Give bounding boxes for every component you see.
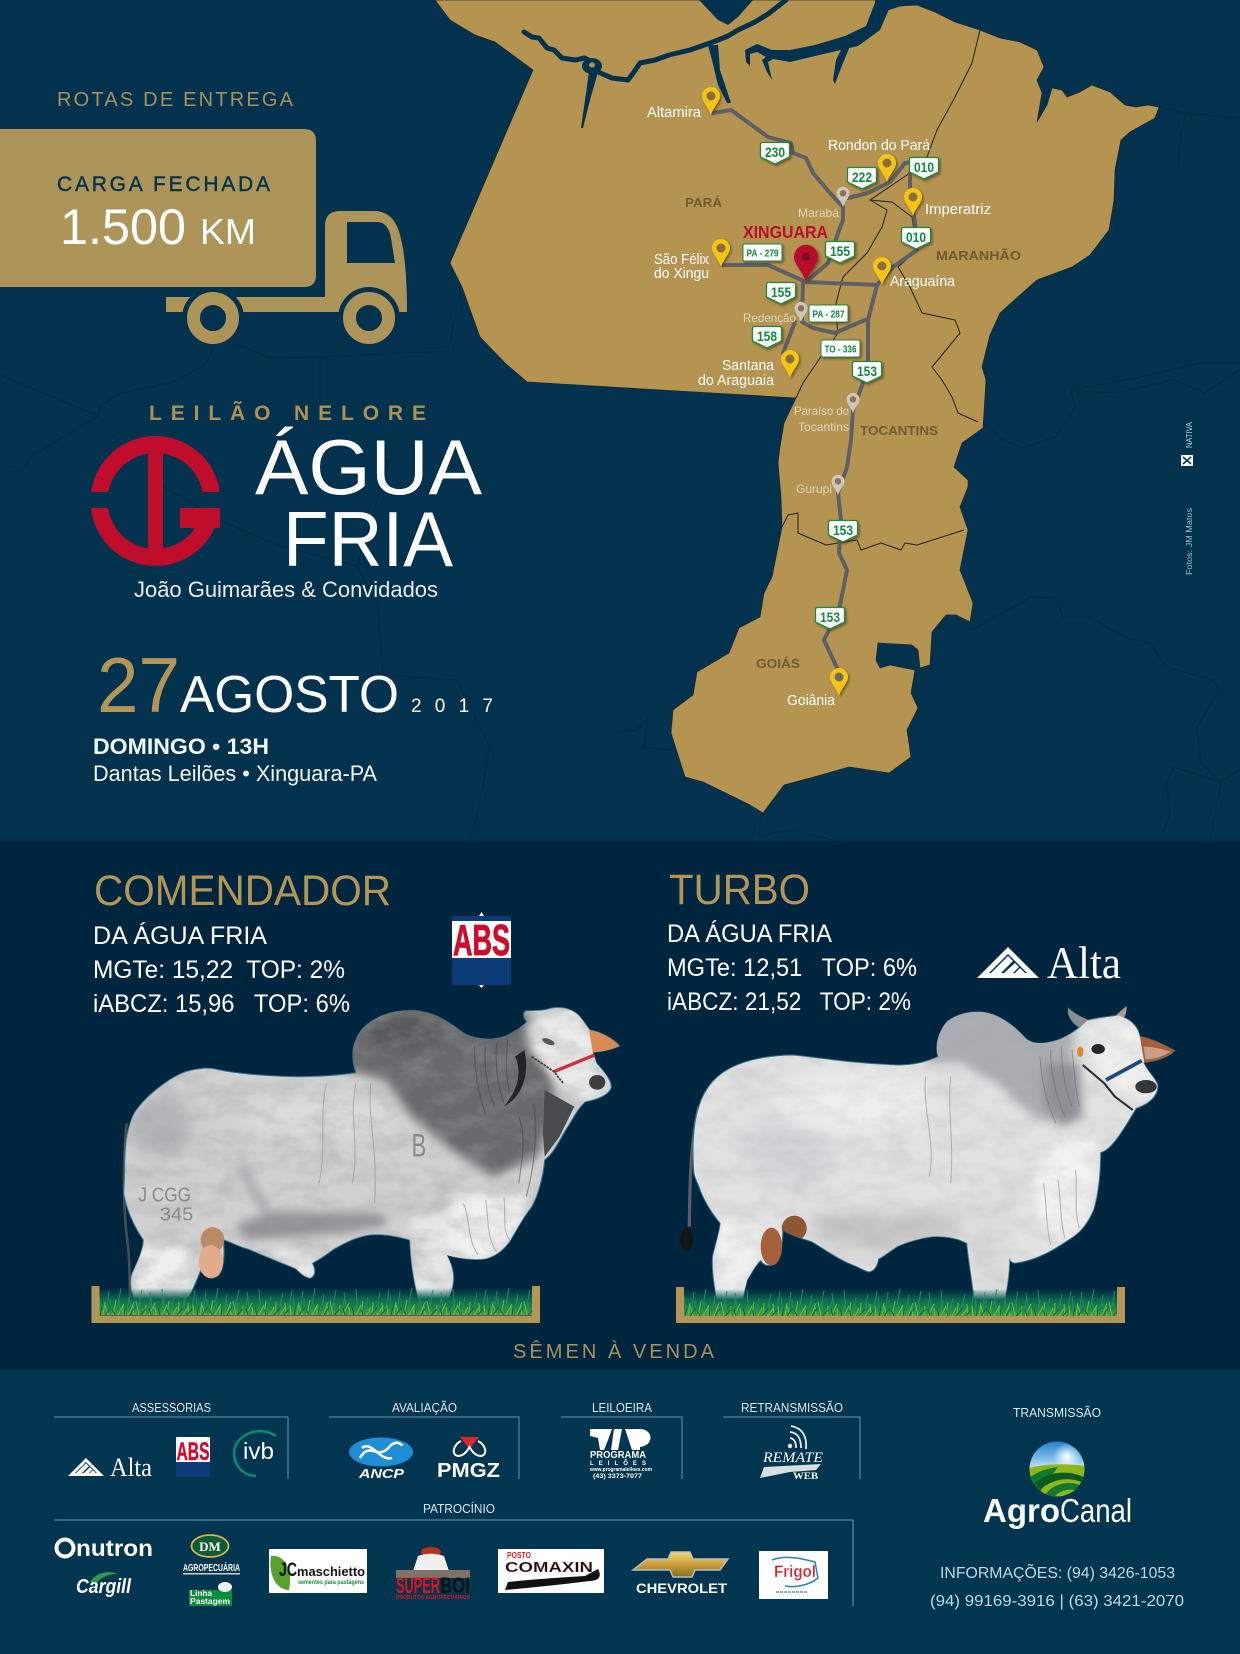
road tag PA-287 <box>809 305 848 322</box>
heading: PATROCÍNIO <box>423 1501 495 1516</box>
logo: ivb <box>234 1431 276 1476</box>
pin: Santana do Araguaia <box>781 350 799 378</box>
background: footer section <box>0 1370 1240 1654</box>
rivers <box>524 0 893 128</box>
bull origin: DA ÁGUA FRIA <box>93 921 267 950</box>
logo: JC Maschietto: maschietto <box>297 1564 365 1579</box>
heading: AVALIAÇÃO <box>392 1401 457 1415</box>
background: upper section <box>0 0 1240 841</box>
highway shield 010 south: 010 <box>906 229 926 245</box>
contact phone line 1: INFORMAÇÕES: (94) 3426-1053 <box>940 1562 1175 1582</box>
logo: Programa Leilões: (43) 3373-7077 <box>593 1474 643 1480</box>
bull photo illustration: Comendador <box>122 1006 620 1298</box>
highway shield 010 north: 010 <box>914 159 934 175</box>
pin: Goiânia <box>830 668 848 696</box>
highway shield 155 north <box>826 242 854 263</box>
panel: Comendador <box>92 875 620 1323</box>
logo: PMGZ <box>437 1437 500 1482</box>
highway shield 153 Gurupi <box>828 520 858 542</box>
background: bulls section <box>0 841 1240 1370</box>
bull origin: DA ÁGUA FRIA <box>667 919 832 948</box>
bull name: COMENDADOR <box>94 867 391 915</box>
logo: Alta <box>68 1453 152 1482</box>
logo: JC Maschietto: JC <box>279 1560 297 1581</box>
highway shield 153 Goiás: 153 <box>820 609 840 625</box>
logo: DM Agropecuária <box>183 1535 240 1574</box>
truck wheel arches <box>182 287 400 349</box>
logo: Alta: Alta <box>110 1453 152 1482</box>
logo: Posto Comaxin: POSTO <box>507 1551 531 1560</box>
banner: semen for sale: SÊMEN À VENDA <box>513 1340 715 1363</box>
logo: ABS: ABS <box>176 1438 210 1466</box>
road tag TO-336 <box>821 340 860 357</box>
highway shield 230 <box>760 142 790 164</box>
highway shield 153 Araguaína: 153 <box>857 363 877 379</box>
logo: Linha Pastagem <box>189 1582 232 1606</box>
logo: Remate Web <box>760 1426 823 1481</box>
secondary city labels: Gurupi <box>796 482 832 496</box>
highway shield 230: 230 <box>765 144 785 160</box>
city labels: Altamira <box>647 105 702 121</box>
footer group: patrocínio <box>54 1501 853 1606</box>
map: route states <box>435 0 1159 813</box>
distance unit: KM <box>200 211 256 252</box>
road tag PA-279 <box>743 244 782 261</box>
truck illustration <box>0 129 407 349</box>
city labels: Araguaína <box>890 274 956 290</box>
transmission block <box>930 1406 1184 1610</box>
event time: DOMINGO • 13H <box>93 734 269 759</box>
city labels: Santana <box>722 358 775 374</box>
logo: Programa Leilões: PROGRAMA <box>590 1449 646 1461</box>
logo: ivb: ivb <box>243 1438 274 1464</box>
bull photo illustration: Comendador: B <box>412 1128 426 1164</box>
bull photo illustration: Comendador: J CGG <box>138 1183 191 1206</box>
pin: Marabá <box>837 187 849 207</box>
footer group: retransmissão <box>723 1401 860 1481</box>
MGTe stats: MGTe: 15,22 TOP: 2% <box>93 956 345 984</box>
pin: Rondon do Pará <box>878 154 896 182</box>
road tag PA-279: PA - 279 <box>746 248 779 260</box>
logo: ABS: ABS <box>453 916 510 965</box>
logo: Linha Pastagem: Linha <box>190 1588 212 1598</box>
date day: 27 <box>97 641 180 729</box>
logo: Programa Leilões: LEILÕES <box>590 1460 646 1467</box>
truck cab <box>166 211 407 312</box>
heading: RETRANSMISSÃO <box>741 1401 843 1415</box>
pin: Redenção <box>795 302 807 322</box>
heading: ASSESSORIAS <box>132 1401 211 1415</box>
secondary city labels: Marabá <box>798 206 839 220</box>
logo: AgroCanal wordmark: Agro <box>983 1492 1060 1529</box>
highway shield 158 <box>752 326 782 348</box>
road tag PA-287: PA - 287 <box>812 310 845 320</box>
logo: Água Fria emblem <box>99 444 220 558</box>
logo: AgroCanal wordmark <box>983 1492 1132 1529</box>
cargo box <box>0 129 316 287</box>
credit: Nativa <box>1181 421 1194 466</box>
highway shield 155 south <box>766 282 796 304</box>
logo: Super Boi <box>396 1547 471 1601</box>
state labels: TOCANTINS <box>860 423 938 438</box>
logo wordmark: Água Fria: FRIA <box>283 495 453 583</box>
bracket <box>723 1417 860 1479</box>
state labels: MARANHÃO <box>936 248 1021 263</box>
iABCZ stats: iABCZ: 21,52 TOP: 2% <box>667 988 911 1016</box>
logo: ABS <box>452 912 511 988</box>
highway shield 010 north <box>910 158 938 179</box>
pasture base: Turbo <box>676 1286 1125 1323</box>
heading: TRANSMISSÃO <box>1013 1406 1101 1420</box>
pin: São Félix do Xingu <box>712 239 730 267</box>
logo: AgroCanal wordmark: Canal <box>1060 1492 1132 1529</box>
bull photo illustration: Turbo <box>680 1006 1176 1300</box>
secondary city labels <box>743 206 849 496</box>
logo: Linha Pastagem: Pastagem <box>190 1596 230 1606</box>
pin: Imperatriz <box>904 188 922 216</box>
pin: Paraíso do Tocantins <box>847 393 859 413</box>
secondary city labels: Tocantins <box>798 420 849 434</box>
logo wordmark: Água Fria <box>255 423 482 583</box>
logo: Super Boi: SUPER <box>396 1573 440 1598</box>
highway shield 155 south: 155 <box>771 284 791 300</box>
logo: Chevrolet <box>633 1552 728 1596</box>
city labels: do Xingu <box>654 266 709 282</box>
highway shield 222 <box>848 168 876 189</box>
bracket <box>561 1417 682 1479</box>
logo: Posto Comaxin <box>498 1549 604 1593</box>
logo: PMGZ: PMGZ <box>437 1460 500 1482</box>
logo: nutron: nutron <box>76 1535 153 1561</box>
logo: ABS <box>176 1437 210 1477</box>
credit: Nativa: NATIVA <box>1185 421 1194 448</box>
logo: JC Maschietto <box>269 1549 367 1593</box>
MGTe stats: MGTe: 12,51 TOP: 6% <box>667 954 917 982</box>
state labels: GOIÁS <box>756 656 800 671</box>
cargo label: CARGA FECHADA <box>57 173 270 196</box>
logo: Frigol <box>759 1551 828 1599</box>
city labels: São Félix <box>654 252 710 268</box>
bracket <box>329 1417 519 1479</box>
state borders <box>782 30 980 550</box>
highway shield 158: 158 <box>757 328 777 344</box>
highway shield 222: 222 <box>852 169 872 185</box>
logo: Programa Leilões <box>589 1429 653 1480</box>
heading: LEILOEIRA <box>592 1401 653 1415</box>
city labels: Imperatriz <box>925 202 991 218</box>
date month: AGOSTO <box>180 666 399 724</box>
contact phone line 2: (94) 99169-3916 | (63) 3421-2070 <box>930 1593 1184 1610</box>
heading: rotas de entrega: ROTAS DE ENTREGA <box>57 89 294 111</box>
logo: Super Boi: BOI <box>440 1573 470 1598</box>
bull name: TURBO <box>669 866 810 914</box>
date <box>97 641 493 729</box>
highway shield 153 Araguaína <box>852 362 882 383</box>
highway shield 155 north: 155 <box>830 243 850 259</box>
highway shield 010 south <box>902 228 930 249</box>
truck window <box>347 222 395 263</box>
logo: Cargill: Cargill <box>76 1576 131 1598</box>
city labels <box>647 105 991 709</box>
map landmass <box>435 0 1159 813</box>
city labels: Rondon do Pará <box>828 138 931 154</box>
logo: ANCP: ANCP <box>358 1466 404 1481</box>
city labels: Goiânia <box>787 693 836 709</box>
logo wordmark: Água Fria: ÁGUA <box>255 423 482 511</box>
state labels: PARÁ <box>685 195 723 210</box>
logo: Alta: Alta <box>1047 938 1121 988</box>
label: leilão nelore: LEILÃO NELORE <box>149 402 426 425</box>
logo: Chevrolet: CHEVROLET <box>636 1581 728 1596</box>
neighbouring state outlines <box>0 107 1240 841</box>
secondary city labels: Paraíso do <box>794 404 849 418</box>
footer group: assessorias <box>54 1401 288 1482</box>
truck rear wheel <box>194 298 232 338</box>
logo: ANCP <box>349 1438 413 1481</box>
pin: Xinguara <box>794 245 818 282</box>
iABCZ stats: iABCZ: 15,96 TOP: 6% <box>93 990 350 1018</box>
credit: photos: Fotos: JM Matos <box>1184 508 1194 575</box>
bull photo illustration: Comendador: 345 <box>160 1205 193 1225</box>
bracket <box>54 1417 288 1479</box>
logo: Posto Comaxin: COMAXIN <box>505 1559 593 1576</box>
secondary city labels: Redenção <box>743 311 796 325</box>
destination label XINGUARA: XINGUARA <box>743 222 828 242</box>
highways <box>713 110 922 668</box>
footer group: avaliação <box>329 1401 519 1482</box>
logo: Alta <box>977 938 1121 988</box>
state labels <box>685 195 1021 671</box>
logo: JC Maschietto: sementes para pastagens <box>298 1579 364 1586</box>
pasture base: Comendador <box>92 1285 540 1323</box>
logo: Frigol: Frigol <box>774 1562 816 1581</box>
bracket <box>54 1520 853 1606</box>
pin: Gurupi <box>832 475 844 495</box>
logo: Remate Web: REMATE <box>762 1450 823 1466</box>
city labels: do Araguaia <box>698 373 775 389</box>
truck front wheel <box>350 298 388 338</box>
logo: AgroCanal globe <box>1029 1441 1085 1497</box>
distance value: 1.500 <box>60 199 186 255</box>
panel: Turbo <box>668 874 1176 1323</box>
footer group: leiloeira <box>561 1401 682 1480</box>
highway shield 153 Gurupi: 153 <box>833 522 853 538</box>
highway shield 153 Goiás <box>816 608 844 629</box>
road tag TO-336: TO - 336 <box>824 344 857 356</box>
logo: DM Agropecuária: AGROPECUÁRIA <box>183 1561 240 1574</box>
logo: DM Agropecuária: DM <box>199 1539 221 1554</box>
logo: Remate Web: WEB <box>793 1471 818 1481</box>
pin: Altamira <box>702 87 720 115</box>
logo: Programa Leilões: www.programaleiloes.com <box>589 1467 653 1473</box>
event venue: Dantas Leilões • Xinguara-PA <box>93 761 377 786</box>
date year: 2017 <box>411 696 493 717</box>
pin: Araguaína <box>873 257 891 285</box>
subtitle: João Guimarães & Convidados <box>134 577 438 602</box>
logo: Super Boi: PRODUTOS AGROPECUÁRIOS <box>396 1594 471 1601</box>
